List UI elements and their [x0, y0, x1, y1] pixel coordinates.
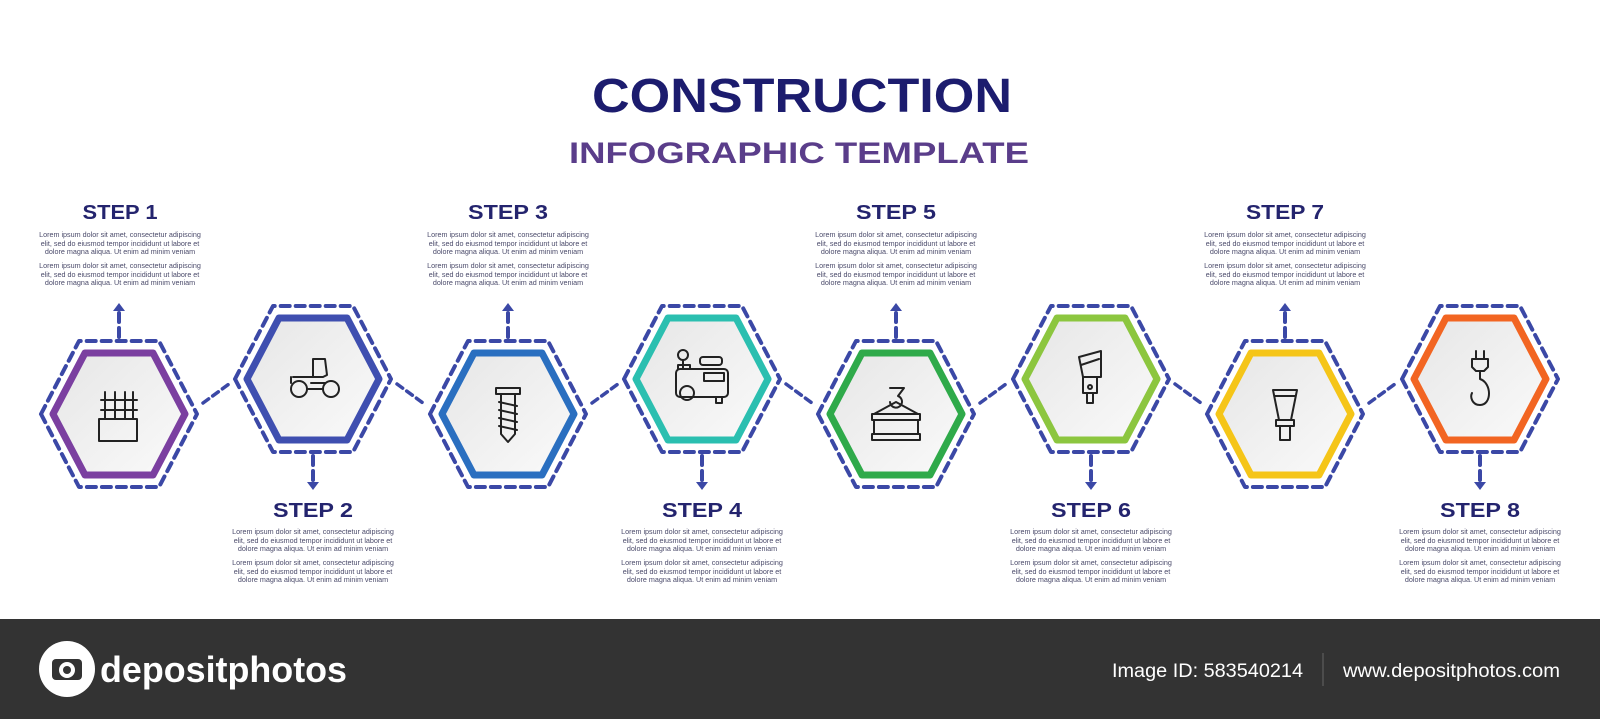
step 3 text — [427, 202, 589, 287]
step 4 text: dolore magna aliqua. Ut enim ad minim veniam — [627, 544, 777, 553]
step 3 text: dolore magna aliqua. Ut enim ad minim veniam — [433, 278, 583, 287]
step 1 text: Lorem ipsum dolor sit amet, consectetur adipiscing — [39, 261, 201, 270]
icon: putty knife — [1079, 351, 1101, 403]
step 2 text: elit, sed do eiusmod tempor incididunt ut labore et — [234, 567, 392, 576]
step 7 text — [1204, 202, 1366, 287]
step 8 text — [1399, 500, 1561, 584]
connectors — [203, 384, 1395, 403]
step 7 text: Lorem ipsum dolor sit amet, consectetur adipiscing — [1204, 261, 1366, 270]
step 1 text: Lorem ipsum dolor sit amet, consectetur adipiscing — [39, 230, 201, 239]
step 3 text: Lorem ipsum dolor sit amet, consectetur adipiscing — [427, 230, 589, 239]
step 5 text: dolore magna aliqua. Ut enim ad minim veniam — [821, 247, 971, 256]
title: CONSTRUCTION — [592, 70, 1012, 123]
icon: screw — [496, 388, 520, 442]
subtitle: INFOGRAPHIC TEMPLATE — [569, 137, 1029, 170]
step 4 text: dolore magna aliqua. Ut enim ad minim veniam — [627, 575, 777, 584]
step 3 — [430, 303, 586, 487]
step 6 text: Lorem ipsum dolor sit amet, consectetur adipiscing — [1010, 527, 1172, 536]
step 3 text: Lorem ipsum dolor sit amet, consectetur adipiscing — [427, 261, 589, 270]
step 1 text: dolore magna aliqua. Ut enim ad minim veniam — [45, 247, 195, 256]
step 2 text: Lorem ipsum dolor sit amet, consectetur adipiscing — [232, 558, 394, 567]
step 8 text: elit, sed do eiusmod tempor incididunt ut labore et — [1401, 567, 1559, 576]
step 7 text: dolore magna aliqua. Ut enim ad minim veniam — [1210, 278, 1360, 287]
icon: hook — [1471, 351, 1489, 405]
step 4 text: elit, sed do eiusmod tempor incididunt ut labore et — [623, 567, 781, 576]
step 8 text: Lorem ipsum dolor sit amet, consectetur adipiscing — [1399, 527, 1561, 536]
step 4 text: STEP 4 — [662, 500, 743, 522]
step 6 text: elit, sed do eiusmod tempor incididunt ut labore et — [1012, 536, 1170, 545]
step 1 text: dolore magna aliqua. Ut enim ad minim veniam — [45, 278, 195, 287]
step 4 text — [621, 500, 783, 584]
website: www.depositphotos.com — [1342, 661, 1560, 682]
step 1 text: elit, sed do eiusmod tempor incididunt ut labore et — [41, 239, 199, 248]
step 5 text: Lorem ipsum dolor sit amet, consectetur adipiscing — [815, 261, 977, 270]
step 7 text: elit, sed do eiusmod tempor incididunt ut labore et — [1206, 239, 1364, 248]
step 6 text: dolore magna aliqua. Ut enim ad minim veniam — [1016, 575, 1166, 584]
step 2 text: dolore magna aliqua. Ut enim ad minim veniam — [238, 575, 388, 584]
step 6 text: STEP 6 — [1051, 500, 1131, 522]
step 5 text: elit, sed do eiusmod tempor incididunt ut labore et — [817, 270, 975, 279]
step 5 text: elit, sed do eiusmod tempor incididunt ut labore et — [817, 239, 975, 248]
step 4 text: Lorem ipsum dolor sit amet, consectetur adipiscing — [621, 558, 783, 567]
step 5 text: dolore magna aliqua. Ut enim ad minim veniam — [821, 278, 971, 287]
icon: camera logo — [39, 641, 95, 697]
step 6 text: elit, sed do eiusmod tempor incididunt ut labore et — [1012, 567, 1170, 576]
step 1 — [41, 303, 197, 487]
step 4 text: Lorem ipsum dolor sit amet, consectetur adipiscing — [621, 527, 783, 536]
icon: chisel — [1273, 390, 1297, 440]
step 1 text — [39, 202, 201, 287]
step 8 text: dolore magna aliqua. Ut enim ad minim veniam — [1405, 544, 1555, 553]
step 1 text: STEP 1 — [82, 202, 158, 224]
step 5 text: STEP 5 — [856, 202, 936, 224]
image id: Image ID: 583540214 — [1112, 661, 1303, 682]
icon: crane hook with load — [872, 388, 920, 440]
step 8 text: STEP 8 — [1440, 500, 1520, 522]
icon: air compressor — [676, 350, 728, 403]
step 7 text: elit, sed do eiusmod tempor incididunt ut labore et — [1206, 270, 1364, 279]
step 2 text: dolore magna aliqua. Ut enim ad minim veniam — [238, 544, 388, 553]
step 8 text: Lorem ipsum dolor sit amet, consectetur adipiscing — [1399, 558, 1561, 567]
step 2 text: elit, sed do eiusmod tempor incididunt ut labore et — [234, 536, 392, 545]
step 2 text — [232, 500, 394, 584]
logo text: depositphotos — [100, 649, 347, 690]
step 2 — [235, 306, 391, 490]
step 8 text: elit, sed do eiusmod tempor incididunt ut labore et — [1401, 536, 1559, 545]
icon: road roller — [291, 359, 339, 397]
footer bar — [0, 619, 1600, 719]
step 6 text: Lorem ipsum dolor sit amet, consectetur adipiscing — [1010, 558, 1172, 567]
step 6 — [1013, 306, 1169, 490]
step 1 text: elit, sed do eiusmod tempor incididunt ut labore et — [41, 270, 199, 279]
step 8 text: dolore magna aliqua. Ut enim ad minim veniam — [1405, 575, 1555, 584]
step 3 text: dolore magna aliqua. Ut enim ad minim veniam — [433, 247, 583, 256]
step 7 text: STEP 7 — [1246, 202, 1324, 224]
step 2 text: STEP 2 — [273, 500, 353, 522]
step 6 text: dolore magna aliqua. Ut enim ad minim veniam — [1016, 544, 1166, 553]
step 3 text: elit, sed do eiusmod tempor incididunt ut labore et — [429, 270, 587, 279]
step 7 text: dolore magna aliqua. Ut enim ad minim veniam — [1210, 247, 1360, 256]
step 6 text — [1010, 500, 1172, 584]
step 3 text: elit, sed do eiusmod tempor incididunt ut labore et — [429, 239, 587, 248]
icon: rebar frame — [99, 392, 137, 441]
step 8 — [1402, 306, 1558, 490]
step 5 — [818, 303, 974, 487]
step 4 text: elit, sed do eiusmod tempor incididunt ut labore et — [623, 536, 781, 545]
step 4 — [624, 306, 780, 490]
step 7 text: Lorem ipsum dolor sit amet, consectetur adipiscing — [1204, 230, 1366, 239]
step 3 text: STEP 3 — [468, 202, 548, 224]
step 2 text: Lorem ipsum dolor sit amet, consectetur adipiscing — [232, 527, 394, 536]
step 7 — [1207, 303, 1363, 487]
step 5 text: Lorem ipsum dolor sit amet, consectetur adipiscing — [815, 230, 977, 239]
step 5 text — [815, 202, 977, 287]
